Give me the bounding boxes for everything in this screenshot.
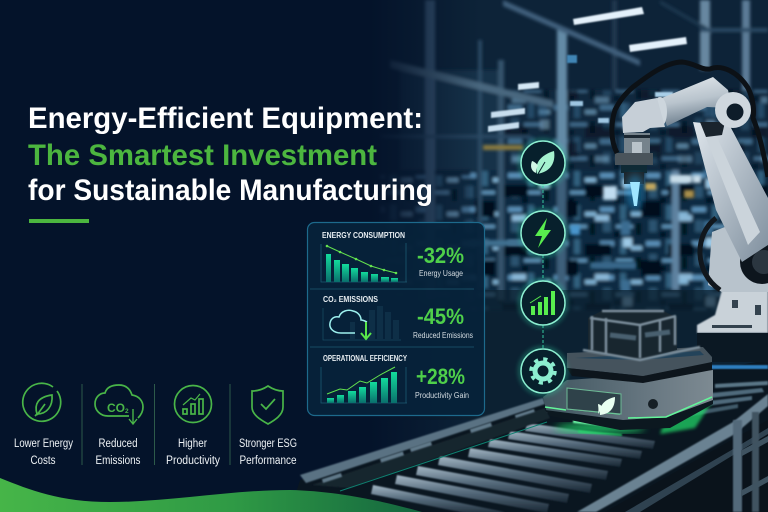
base cylinder xyxy=(697,284,768,333)
fixture xyxy=(588,310,677,360)
icon: CO2 cloud: 2 xyxy=(125,408,129,415)
benefit: stronger ESG performance: Stronger ESG xyxy=(239,438,297,450)
bar chart: energy xyxy=(321,244,407,282)
benefit: stronger ESG performance: Performance xyxy=(240,455,296,467)
forearm xyxy=(657,77,732,126)
benefit: reduced emissions: Emissions xyxy=(96,455,141,467)
title underline xyxy=(29,219,89,223)
metric: energy consumption xyxy=(321,231,464,282)
icon: CO2 cloud: CO xyxy=(107,401,125,415)
panel: metrics xyxy=(308,222,484,416)
wrist xyxy=(622,98,665,133)
green wave xyxy=(0,478,422,512)
ceiling lights xyxy=(488,7,687,132)
bar chart: efficiency xyxy=(321,367,407,403)
lower dim factory xyxy=(380,290,768,420)
body xyxy=(543,370,713,424)
metric: operational efficiency: OPERATIONAL EFFICIENCY xyxy=(323,354,408,363)
rollers xyxy=(371,381,768,512)
cable xyxy=(612,62,768,177)
beams and columns xyxy=(425,0,435,300)
icon: shield check xyxy=(252,386,283,424)
metric: operational efficiency: +28% xyxy=(416,364,465,389)
upper arm xyxy=(693,122,768,262)
front panel xyxy=(567,388,621,414)
right rail xyxy=(605,420,768,512)
benefit: lower energy costs xyxy=(14,383,73,467)
metric: CO2 emissions: Reduced Emissions xyxy=(413,331,473,340)
metric: CO2 emissions xyxy=(323,295,473,340)
metric: CO2 emissions: -45% xyxy=(417,304,464,329)
benefit: higher productivity: Productivity xyxy=(166,455,220,467)
left fade over photo xyxy=(0,0,480,512)
icon: lightning bolt circle xyxy=(520,210,566,256)
top plate xyxy=(567,347,712,376)
benefit: lower energy costs: Costs xyxy=(30,455,56,467)
icon column connector xyxy=(542,185,544,350)
benefit: reduced emissions: Reduced xyxy=(98,438,138,450)
lower body xyxy=(708,215,768,292)
bright machine highlights xyxy=(470,145,701,269)
ghost chart and cloud xyxy=(323,306,401,340)
benefit: lower energy costs: Lower Energy xyxy=(14,438,73,450)
title: for Sustainable Manufacturing xyxy=(28,174,433,207)
title: The Smartest Investment xyxy=(28,139,377,172)
icon: gear circle xyxy=(520,348,566,394)
benefit: stronger ESG performance xyxy=(239,386,297,467)
robot arm xyxy=(612,62,768,369)
metric: operational efficiency: Productivity Gain xyxy=(415,391,469,400)
left rail xyxy=(300,398,545,483)
icon: CO2 cloud xyxy=(95,385,143,424)
metric: energy consumption: Energy Usage xyxy=(419,269,463,278)
glow edge xyxy=(545,397,712,418)
metric: operational efficiency xyxy=(321,354,469,403)
icon: leaf in ring xyxy=(23,383,61,421)
nozzle glow xyxy=(626,174,644,210)
benefit: reduced emissions xyxy=(95,385,143,467)
elbow joint xyxy=(715,92,751,128)
AGV platform xyxy=(543,310,713,436)
factory background photo xyxy=(340,0,768,512)
benefit: higher productivity: Higher xyxy=(178,438,207,450)
icon: growth bars circle xyxy=(520,280,566,326)
metric: energy consumption: ENERGY CONSUMPTION xyxy=(322,231,405,240)
tool head xyxy=(624,133,650,153)
conveyor floor xyxy=(290,360,768,512)
icon: leaf badge xyxy=(598,397,615,415)
icon: chart in ring xyxy=(174,386,212,422)
metric: CO2 emissions: CO₂ EMISSIONS xyxy=(323,295,379,304)
benefit: higher productivity xyxy=(166,386,220,467)
metric: energy consumption: -32% xyxy=(417,243,464,268)
title xyxy=(28,102,433,207)
title: Energy-Efficient Equipment: xyxy=(28,102,423,135)
icon: leaf circle xyxy=(520,140,566,186)
